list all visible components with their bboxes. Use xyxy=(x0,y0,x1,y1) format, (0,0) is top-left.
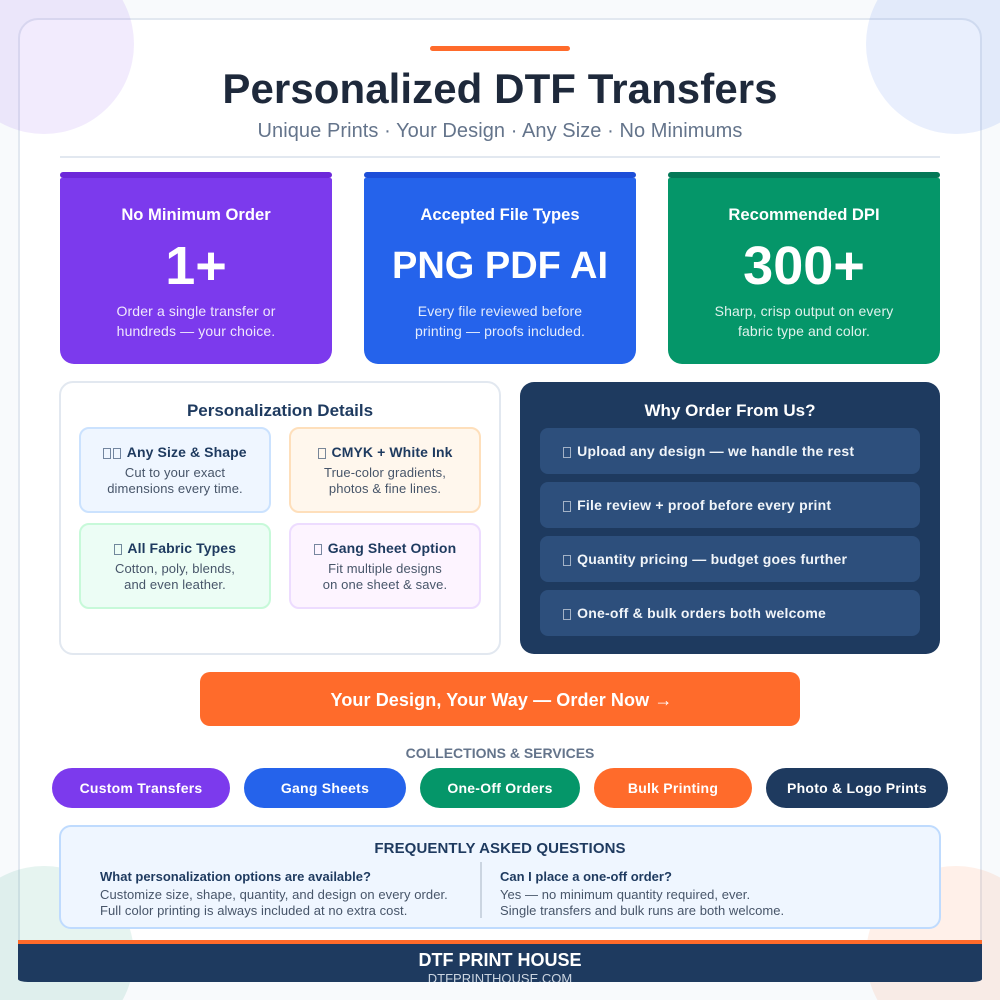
stat number: 1+ xyxy=(165,236,227,296)
text: Cut to your exact xyxy=(125,465,225,480)
question 1 xyxy=(100,869,448,918)
top bar xyxy=(364,172,636,178)
panel: accepted file types xyxy=(364,172,636,364)
reason 3: Quantity pricing — budget goes further xyxy=(577,551,847,567)
card background xyxy=(60,178,332,364)
detail: all fabric types xyxy=(79,523,271,609)
reason 3 xyxy=(540,536,920,582)
pill: gang sheets: Gang Sheets xyxy=(281,780,369,796)
panel: recommended dpi xyxy=(668,172,940,364)
stat description: Every file reviewed before xyxy=(418,303,582,319)
text: photos & fine lines. xyxy=(329,481,441,496)
stat description: fabric type and color. xyxy=(738,323,870,339)
stat description xyxy=(415,303,585,339)
reason 4 xyxy=(540,590,920,636)
card background xyxy=(364,178,636,364)
stat description: hundreds — your choice. xyxy=(117,323,275,339)
text xyxy=(324,465,446,496)
question 2: Single transfers and bulk runs are both welcome. xyxy=(500,903,784,918)
accent bar xyxy=(430,46,570,51)
collections heading: COLLECTIONS & SERVICES xyxy=(406,745,594,761)
question 2: Can I place a one-off order? xyxy=(500,869,672,884)
call to action button: Your Design, Your Way — Order Now → xyxy=(331,690,672,710)
question 1: What personalization options are available? xyxy=(100,869,371,884)
stat heading: Accepted File Types xyxy=(420,205,580,224)
decorative circle: bottom left xyxy=(0,866,134,1000)
pill: custom transfers: Custom Transfers xyxy=(80,780,202,796)
call to action button xyxy=(200,672,800,726)
panel: no minimum order xyxy=(60,172,332,364)
decorative circle: top left xyxy=(0,0,134,134)
card background xyxy=(668,178,940,364)
heading: CMYK + White Ink xyxy=(331,444,452,460)
pill: photo and logo prints xyxy=(766,768,948,808)
pill: gang sheets xyxy=(244,768,406,808)
panel: personalization details xyxy=(59,381,501,655)
subtitle: Unique Prints · Your Design · Any Size · No Minimums xyxy=(258,120,742,142)
title: Personalized DTF Transfers xyxy=(222,65,778,112)
heading: All Fabric Types xyxy=(127,540,236,556)
question 2: Yes — no minimum quantity required, ever. xyxy=(500,887,750,902)
stat description xyxy=(715,303,894,339)
panel heading: Personalization Details xyxy=(187,401,373,420)
question 1: Customize size, shape, quantity, and design on every order. xyxy=(100,887,448,902)
text xyxy=(115,561,235,592)
reason 1: Upload any design — we handle the rest xyxy=(577,443,854,459)
pill: custom transfers xyxy=(52,768,230,808)
pill: bulk printing xyxy=(594,768,752,808)
stat heading: No Minimum Order xyxy=(121,205,271,224)
stat description xyxy=(116,303,276,339)
panel: why order from us xyxy=(520,382,940,654)
decorative circle: top right xyxy=(866,0,1000,134)
heading: Any Size & Shape xyxy=(127,444,247,460)
faq heading: FREQUENTLY ASKED QUESTIONS xyxy=(374,840,626,857)
top bar xyxy=(668,172,940,178)
heading: Gang Sheet Option xyxy=(328,540,456,556)
text: on one sheet & save. xyxy=(323,577,447,592)
decorative circle: bottom right xyxy=(866,866,1000,1000)
pill: bulk printing: Bulk Printing xyxy=(628,780,718,796)
brand name: DTF PRINT HOUSE xyxy=(418,950,582,970)
detail: any size and shape xyxy=(79,427,271,513)
stat value: PNG PDF AI xyxy=(392,245,608,287)
detail: gang sheet option xyxy=(289,523,481,609)
reason 4: One-off & bulk orders both welcome xyxy=(577,605,826,621)
stat description: Sharp, crisp output on every xyxy=(715,303,893,319)
stat heading: Recommended DPI xyxy=(728,205,880,224)
divider xyxy=(60,156,940,158)
text xyxy=(107,465,243,496)
text: True-color gradients, xyxy=(324,465,446,480)
text: Fit multiple designs xyxy=(328,561,442,576)
panel: faq xyxy=(59,825,941,929)
reason 2 xyxy=(540,482,920,528)
detail: cmyk and white ink xyxy=(289,427,481,513)
reason 2: File review + proof before every print xyxy=(577,497,831,513)
stat description: Order a single transfer or xyxy=(116,303,276,319)
question 2 xyxy=(500,869,784,918)
reason 1 xyxy=(540,428,920,474)
panel heading: Why Order From Us? xyxy=(645,401,815,420)
pill: one-off orders: One-Off Orders xyxy=(447,780,553,796)
stat description: printing — proofs included. xyxy=(415,323,585,339)
faq divider xyxy=(480,862,482,918)
stat number: 300+ xyxy=(743,236,865,296)
footer xyxy=(18,940,982,982)
pill: one-off orders xyxy=(420,768,580,808)
top bar xyxy=(60,172,332,178)
text: and even leather. xyxy=(124,577,226,592)
text xyxy=(323,561,447,592)
question 1: Full color printing is always included at no extra cost. xyxy=(100,903,407,918)
pill: photo and logo prints: Photo & Logo Prints xyxy=(787,780,927,796)
text: dimensions every time. xyxy=(107,481,243,496)
text: Cotton, poly, blends, xyxy=(115,561,235,576)
